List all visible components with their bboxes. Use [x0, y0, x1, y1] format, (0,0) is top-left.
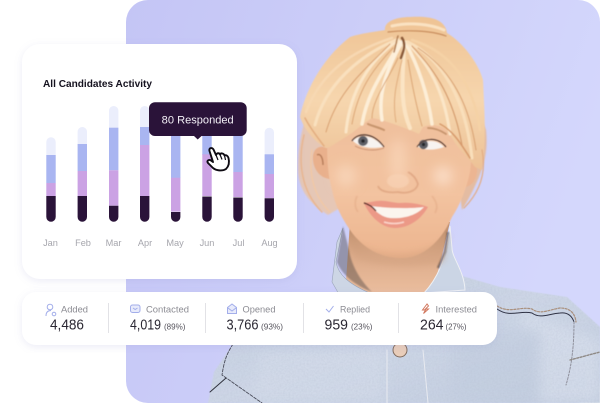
stat: Replied: [324, 304, 373, 334]
stat: Replied: 959: [324, 318, 348, 334]
month labels: Mar: [106, 238, 121, 248]
icon: hand cursor: [207, 148, 229, 170]
stat: Opened: 3,766: [226, 318, 258, 334]
month labels: Jan: [43, 238, 58, 248]
face: [327, 100, 474, 258]
denim texture: [208, 276, 600, 403]
neck: [345, 222, 450, 296]
bar chart: [46, 106, 274, 222]
panel: stats strip: [22, 292, 497, 345]
chin shadow: [350, 232, 450, 266]
stat: Opened: (93%): [261, 322, 283, 332]
month labels: Jul: [233, 238, 244, 248]
bar: Mar: [109, 106, 118, 222]
icon: person: [46, 304, 56, 316]
bar: Jan: [46, 137, 56, 222]
photo: smiling woman in denim jacket: [208, 17, 600, 403]
left eye: [352, 135, 384, 150]
month labels: Jun: [200, 238, 214, 248]
stat: Contacted: Contacted: [146, 304, 189, 314]
jacket button: [393, 343, 407, 357]
stat: Contacted: [130, 304, 189, 334]
stat: Replied: (23%): [351, 322, 373, 332]
stat: Contacted: 4,019: [130, 318, 161, 334]
icon: open envelope: [228, 304, 236, 314]
bar: Jun: [202, 130, 212, 222]
stat: Interested: 264: [420, 318, 444, 334]
icon: envelope: [130, 305, 140, 312]
month labels: [43, 238, 278, 248]
stat: Interested: Interested: [436, 304, 477, 314]
tooltip: 80 Responded: 80 Responded: [162, 114, 234, 126]
stat: Interested: [420, 304, 477, 334]
month labels: Apr: [138, 238, 152, 248]
month labels: May: [166, 238, 184, 248]
back hair and wisps: [298, 90, 487, 215]
jacket body: [208, 276, 600, 403]
stat: Replied: Replied: [340, 304, 370, 314]
right eye: [417, 139, 446, 150]
bar: Feb: [78, 127, 87, 222]
stat: Opened: [226, 304, 283, 334]
icon: lightning: [422, 304, 428, 314]
hair strands: [301, 24, 483, 212]
stat: Added: Added: [61, 304, 88, 314]
stat: Opened: Opened: [242, 304, 276, 314]
icon: check: [326, 306, 334, 312]
nose: [378, 172, 418, 193]
panel: lavender background: [126, 0, 600, 403]
collar right: [424, 226, 465, 293]
panel: chart card: [22, 44, 297, 279]
stat: Added: [46, 304, 88, 334]
tooltip: 80 Responded: [149, 102, 247, 140]
chart title: All Candidates Activity: [43, 78, 152, 90]
month labels: Aug: [261, 238, 278, 248]
month labels: Feb: [75, 238, 91, 248]
face highlights: [336, 138, 452, 187]
stat: Added: 4,486: [50, 318, 84, 334]
bar: Aug: [265, 128, 274, 222]
bar: Apr: [140, 106, 149, 222]
collar left: [332, 228, 372, 296]
cheek folds: [355, 196, 437, 213]
stat: Contacted: (89%): [164, 322, 186, 332]
hair: [300, 17, 485, 170]
jacket seams: [210, 306, 600, 403]
bar: Jul: [233, 130, 243, 222]
ears: [313, 147, 477, 187]
jacket shading: [250, 310, 600, 403]
dividers: [108, 303, 398, 333]
stat: Interested: (27%): [446, 322, 467, 332]
mouth: [364, 201, 428, 228]
bar: May: [171, 130, 180, 222]
